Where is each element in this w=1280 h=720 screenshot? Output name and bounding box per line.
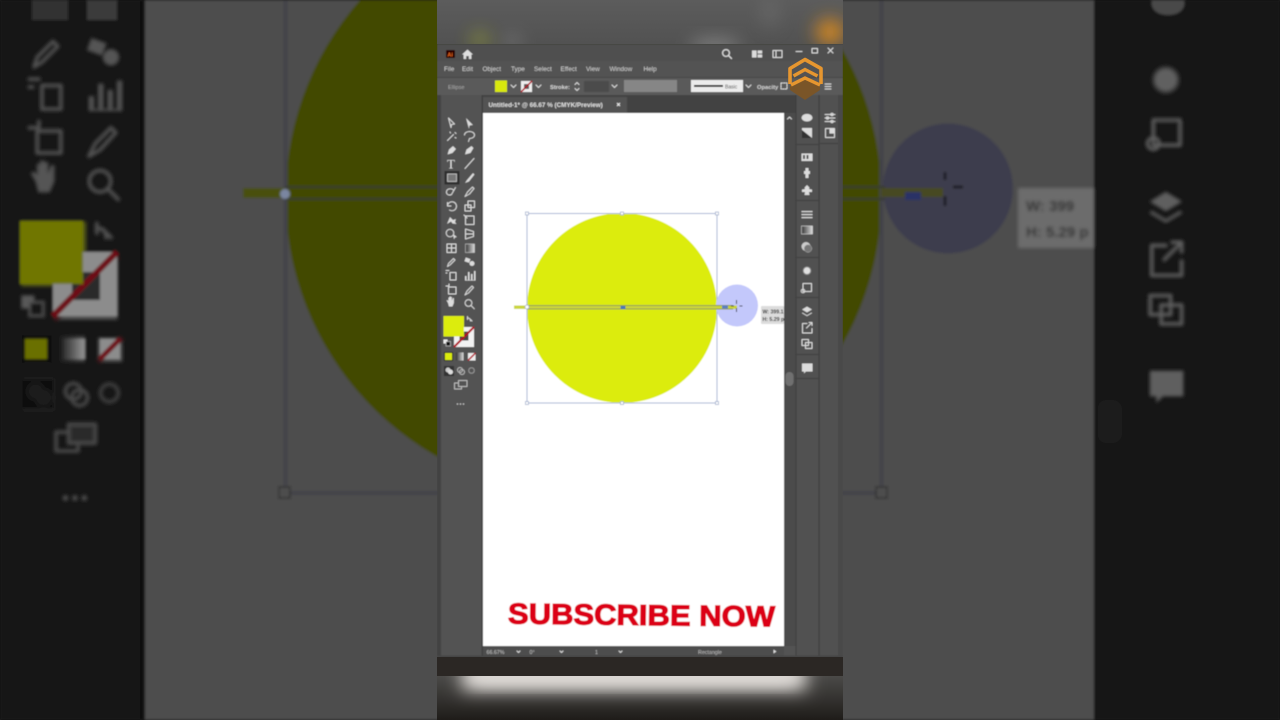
brush definition: Basic — [725, 84, 738, 90]
document tab row — [483, 95, 796, 113]
icon: swatches library — [802, 154, 812, 161]
tool: eraser — [465, 187, 474, 196]
gradient mode — [456, 352, 464, 360]
menu labels: Object — [482, 66, 501, 73]
fill proxy — [444, 316, 464, 336]
dock separators — [796, 143, 838, 379]
tool: zoom — [465, 300, 474, 309]
icon: color guide — [802, 128, 812, 138]
menu bar — [444, 66, 658, 74]
tool: perspective — [466, 229, 474, 239]
status bar: 0° — [530, 650, 535, 656]
icon: search — [723, 50, 732, 58]
menu labels: Help — [644, 66, 657, 73]
right panel dock — [796, 95, 843, 657]
tool: scale — [465, 201, 474, 211]
menu labels: Select — [534, 66, 552, 73]
draw normal — [444, 366, 454, 376]
thin stretched ellipse line — [514, 305, 737, 310]
size tooltip: H: 5.29 p — [762, 317, 784, 323]
lower toolbar group — [444, 257, 476, 405]
artboard — [483, 113, 784, 646]
blurred strip above the window — [437, 0, 843, 44]
status bar: Rectangle — [698, 650, 722, 656]
tool: direct selection — [466, 118, 473, 129]
status bar: 1 — [595, 650, 598, 656]
active tab — [483, 97, 627, 113]
none mode — [468, 353, 476, 360]
tool: column graph — [465, 271, 476, 281]
tool: mesh — [447, 244, 456, 252]
tool: artboard — [446, 284, 456, 294]
menu labels: Edit — [462, 66, 473, 73]
icon: brushes — [804, 168, 810, 178]
yellow circle being drawn — [527, 213, 717, 403]
menu labels: View — [586, 66, 600, 73]
tool: slice — [465, 286, 474, 295]
default colours — [444, 340, 450, 346]
status bar — [437, 646, 843, 657]
stroke swatch — [521, 81, 532, 92]
backdrop: size tooltip — [1018, 188, 1094, 248]
backdrop: crosshair — [945, 172, 963, 206]
control bar: Stroke: — [550, 85, 570, 91]
subscribe now caption: SUBSCRIBE NOW — [508, 599, 776, 634]
screen mode — [454, 380, 467, 389]
crosshair cursor — [731, 300, 742, 312]
dark band under the window — [437, 657, 843, 676]
backdrop: right panel dock — [1094, 0, 1280, 720]
tool: free transform — [464, 215, 474, 224]
icon: layers — [802, 306, 812, 316]
tool: symbol sprayer — [446, 270, 456, 280]
menu labels: Type — [511, 66, 525, 73]
tool: line — [465, 158, 474, 168]
status bar: 66.67% — [486, 650, 505, 656]
tool: curvature — [465, 146, 474, 154]
orange channel logo — [790, 60, 821, 100]
icon: transparency — [802, 242, 812, 252]
backdrop: enlarged dock icons — [1148, 68, 1183, 402]
menu labels — [444, 66, 657, 73]
backdrop: draw normal button — [22, 380, 53, 408]
size tooltip: W: 399.1 — [762, 310, 784, 316]
backdrop: fill proxy — [20, 221, 83, 284]
icon: minimize — [796, 50, 802, 52]
colour mode — [444, 352, 452, 360]
tool: shaper — [446, 188, 456, 195]
backdrop: yellow circle — [286, 0, 881, 495]
draw inside — [469, 368, 474, 373]
icon: artboards panel — [802, 340, 812, 348]
icon: close — [828, 48, 833, 53]
tool: shape builder — [446, 229, 457, 240]
fill swatch — [495, 80, 507, 92]
tool: blend — [464, 257, 474, 266]
backdrop: left tool panel — [0, 0, 145, 720]
icon: symbols — [802, 185, 812, 195]
backdrop: mesh and gradient tool row — [32, 0, 117, 20]
tool: rotate — [448, 202, 456, 211]
backdrop: stretched line — [243, 186, 943, 200]
swap fill and stroke — [468, 316, 472, 321]
vertical scrollbar — [784, 113, 796, 646]
selection bounding box — [526, 212, 718, 404]
stroke proxy — [454, 327, 474, 347]
tool: pen — [448, 146, 456, 154]
icon: maximize — [812, 48, 818, 53]
draw behind — [458, 368, 464, 374]
size tooltip — [761, 306, 784, 324]
menu labels: File — [444, 66, 455, 73]
lower dock icons group — [801, 267, 812, 374]
brush definition — [691, 80, 743, 92]
backdrop: enlarged lower toolbar — [22, 38, 122, 501]
tool: lasso — [464, 132, 474, 142]
left toolbar — [437, 95, 483, 657]
backdrop: stroke proxy — [53, 252, 117, 316]
icon: asset export — [802, 322, 812, 333]
icon: gradient panel — [802, 226, 812, 234]
menu labels: Window — [610, 66, 633, 73]
tool: rectangle selected — [444, 171, 460, 184]
tool: selection — [448, 118, 454, 128]
backdrop: size tooltip: H: 5.29 p — [1026, 224, 1089, 241]
tool: gradient — [466, 244, 474, 252]
icon: appearance — [803, 267, 811, 275]
tool: paintbrush — [465, 173, 474, 183]
icon: stroke — [802, 211, 812, 218]
control bar: Ellipse — [448, 85, 464, 91]
backdrop: size tooltip: W: 399 — [1026, 198, 1074, 215]
icon: Illustrator app badge — [446, 50, 455, 58]
tool: hand — [446, 296, 454, 306]
Illustrator application window — [437, 44, 843, 657]
tool: width — [447, 217, 456, 224]
backdrop: top dock icon — [1152, 0, 1184, 15]
icon: arrange documents — [752, 50, 762, 58]
backdrop: colour mode buttons — [22, 335, 120, 363]
more tools — [457, 403, 464, 405]
icon: graphic styles — [801, 284, 812, 293]
blurred lower reflection — [437, 664, 843, 720]
tool: eyedropper — [448, 258, 455, 266]
icon: workspace — [773, 50, 782, 58]
icon: comments — [802, 364, 812, 374]
backdrop: selection frame — [286, 0, 882, 493]
document tab row: Untitled-1* @ 66.67 % (CMYK/Preview) — [488, 102, 603, 109]
backdrop: canvas — [145, 0, 1094, 720]
control bar: Opacity — [757, 85, 779, 91]
icon: home — [462, 50, 473, 59]
control bar — [448, 79, 832, 94]
tool: type: T — [447, 156, 455, 172]
backdrop: frame handles — [279, 487, 887, 498]
backdrop: cursor circle — [883, 124, 1013, 254]
title bar — [437, 44, 843, 61]
icon: properties — [825, 113, 835, 123]
icon: libraries — [826, 128, 834, 138]
menu labels: Effect — [560, 66, 577, 73]
icon: Illustrator app badge: Ai — [447, 52, 453, 58]
cursor highlight circle — [716, 284, 758, 326]
window base — [437, 44, 843, 657]
tool: magic wand — [448, 132, 456, 140]
icon: color palette — [802, 114, 812, 121]
